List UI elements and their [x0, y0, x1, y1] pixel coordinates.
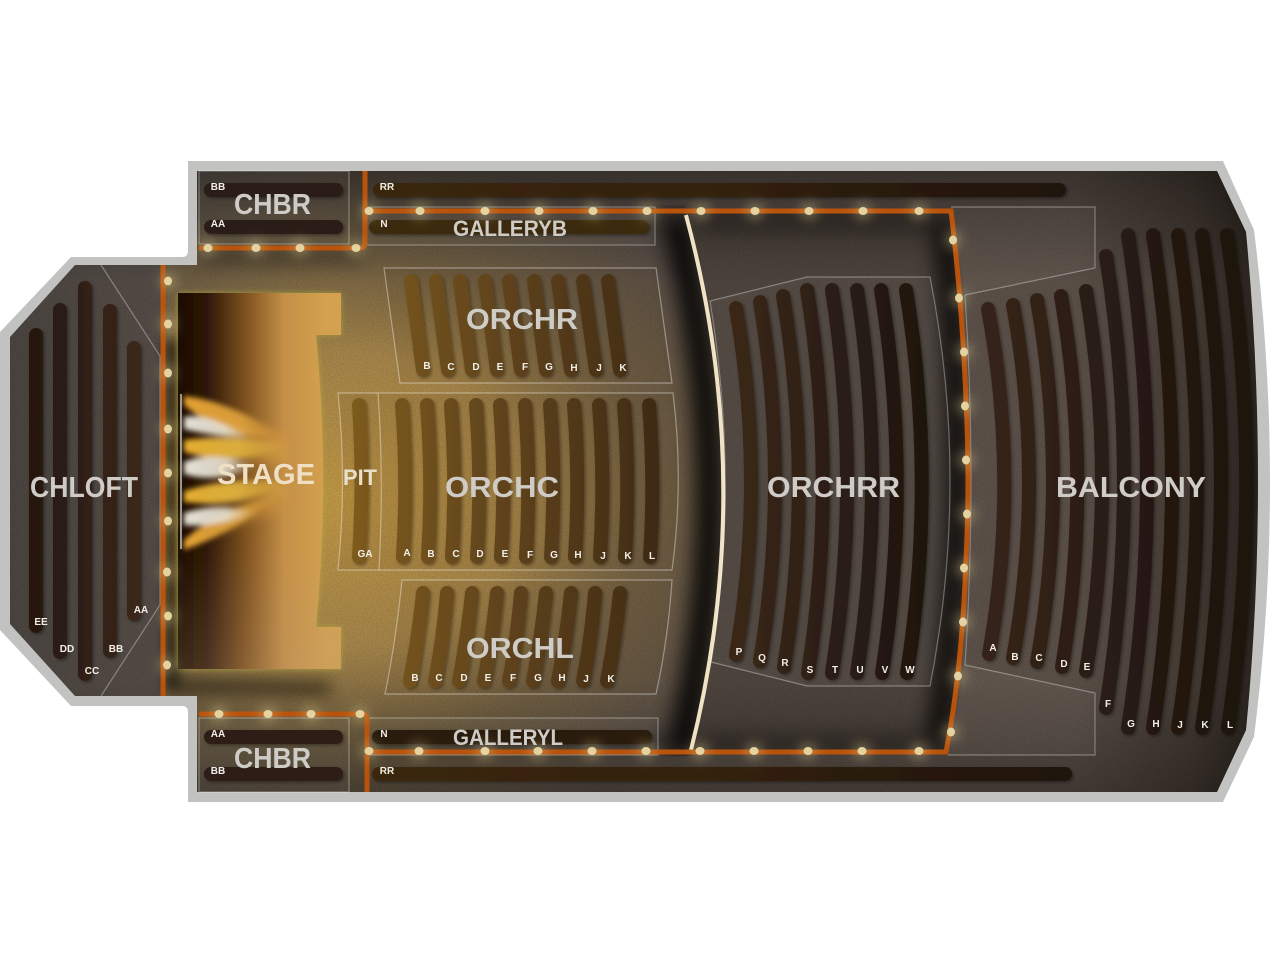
section labels: ORCHC — [445, 472, 559, 504]
section: CHLOFT seat rows — [36, 288, 134, 674]
row labels: G — [545, 362, 553, 373]
row labels — [34, 182, 1233, 777]
row labels: W — [905, 665, 915, 676]
row labels: D — [476, 549, 484, 560]
row labels: N — [380, 219, 388, 230]
section: balcony upper box — [951, 207, 1095, 295]
section labels: GALLERYL — [453, 725, 563, 750]
row labels: A — [403, 548, 411, 559]
row labels: G — [550, 550, 558, 561]
row labels: N — [380, 729, 388, 740]
section: CHBR top — [199, 171, 349, 244]
row labels: AA — [134, 605, 148, 616]
row labels: P — [736, 647, 743, 658]
section labels: ORCHL — [466, 633, 574, 665]
row labels: C — [452, 549, 460, 560]
row labels: C — [435, 673, 443, 684]
row labels: C — [1035, 653, 1043, 664]
row labels: B — [427, 549, 435, 560]
row labels: E — [502, 549, 509, 560]
floor — [0, 161, 1280, 802]
section labels: CHLOFT — [30, 472, 138, 504]
row labels: F — [522, 362, 528, 373]
row labels: H — [570, 363, 578, 374]
row RR bottom — [379, 767, 1065, 781]
row labels: U — [856, 665, 864, 676]
section: chloft outline — [101, 265, 160, 696]
row labels: GA — [358, 549, 372, 560]
row labels: K — [624, 551, 632, 562]
section: ORCHL — [385, 580, 672, 694]
section: BALCONY rows — [988, 235, 1246, 728]
row labels: K — [1201, 720, 1209, 731]
row labels: BB — [211, 766, 225, 777]
row labels: AA — [211, 219, 225, 230]
section: balcony lower box — [948, 665, 1095, 755]
building outline — [0, 161, 1270, 802]
section: gallery L — [366, 718, 658, 755]
section labels: BALCONY — [1056, 472, 1206, 504]
section: ORCHR — [384, 268, 672, 383]
row labels: B — [423, 361, 431, 372]
row labels: D — [472, 362, 480, 373]
section labels — [30, 189, 1206, 775]
row labels: S — [807, 665, 814, 676]
row labels: J — [1177, 720, 1183, 731]
row labels: E — [497, 362, 504, 373]
row labels: V — [882, 665, 889, 676]
row labels: AA — [211, 729, 225, 740]
section: balcony inner edge — [965, 295, 971, 665]
row labels: RR — [380, 182, 395, 193]
perimeter lighting rail — [163, 171, 968, 792]
row labels: EE — [34, 617, 48, 628]
row labels: L — [649, 551, 655, 562]
row labels: Q — [758, 653, 766, 664]
row labels: D — [1060, 659, 1068, 670]
row labels: F — [1105, 699, 1111, 710]
row labels: G — [1127, 719, 1135, 730]
row labels: D — [460, 673, 468, 684]
row labels: H — [574, 550, 582, 561]
section labels: ORCHR — [466, 304, 578, 336]
row labels: E — [1084, 662, 1091, 673]
row labels: C — [447, 362, 455, 373]
row labels: RR — [380, 766, 395, 777]
row labels: J — [596, 363, 602, 374]
section labels: CHBR — [234, 189, 311, 221]
row labels: BB — [109, 644, 123, 655]
row RR top — [380, 183, 1059, 197]
row labels: T — [832, 665, 838, 676]
row labels: J — [600, 551, 606, 562]
row labels: H — [558, 673, 566, 684]
row labels: F — [510, 673, 516, 684]
stage — [178, 293, 341, 669]
section labels: PIT — [343, 465, 378, 490]
section labels: GALLERYB — [453, 216, 567, 241]
section labels: ORCHRR — [767, 472, 900, 504]
row labels: CC — [85, 666, 99, 677]
row labels: H — [1152, 719, 1160, 730]
lights — [163, 207, 971, 755]
row labels: B — [411, 673, 419, 684]
row labels: G — [534, 673, 542, 684]
section labels: CHBR — [234, 743, 311, 775]
section: PIT and ORCHC — [338, 393, 678, 570]
row labels: K — [619, 363, 627, 374]
row labels: E — [485, 673, 492, 684]
row labels: A — [989, 643, 997, 654]
row labels: F — [527, 550, 533, 561]
row labels: B — [1011, 652, 1019, 663]
row labels: K — [607, 674, 615, 685]
row labels: R — [781, 658, 789, 669]
orchestra rear front rail — [686, 215, 723, 750]
section: CHBR bottom — [199, 718, 349, 792]
row labels: J — [583, 674, 589, 685]
row labels: DD — [60, 644, 74, 655]
section: gallery B — [363, 207, 655, 245]
section: ORCHRR — [710, 277, 950, 686]
row labels: L — [1227, 720, 1233, 731]
section labels: STAGE — [217, 459, 315, 491]
row labels: BB — [211, 182, 225, 193]
